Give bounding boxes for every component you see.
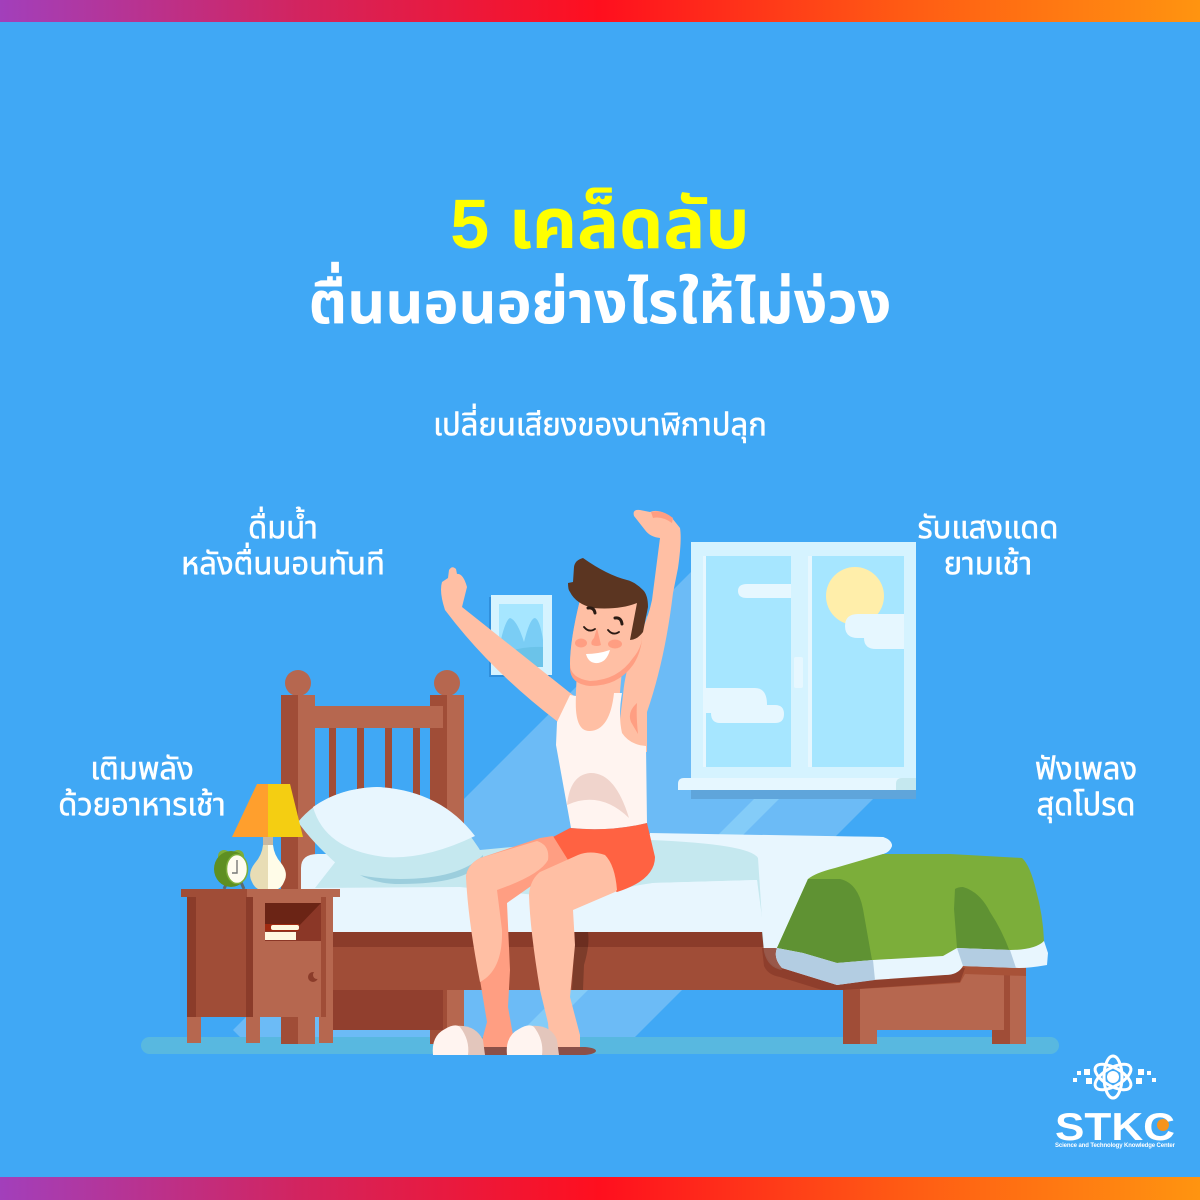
pillow [298,787,483,884]
alarm clock [214,850,248,889]
right arm [618,510,681,752]
tip: morning sunlight [917,510,1059,581]
mattress [301,854,770,932]
hair [568,558,648,640]
front leg [529,852,617,1047]
tip: breakfast: เติมพลัง [90,751,194,786]
shelf [265,903,321,941]
tip: breakfast [58,751,226,822]
title: ตื่นนอนอย่างไรให้ไม่ง่วง [309,261,891,336]
bottom gradient bar [0,1177,1200,1200]
neck [575,670,622,732]
person [433,510,681,1055]
bed sheet [315,833,892,970]
framed picture [489,595,552,677]
logo: atom icon [1091,1056,1135,1098]
green blanket [776,854,1048,985]
tip: favorite music: ฟังเพลง [1035,751,1137,786]
nightstand [181,889,340,1043]
bed headboard [281,670,464,1044]
logo: STKC: Science and Technology Knowledge Center [1055,1143,1176,1149]
window sill shadow [691,790,916,799]
head [570,600,642,686]
blanket underside [776,941,1048,985]
sunlight beam [233,563,882,1044]
nightstand top [181,889,260,897]
cloud: top left [738,584,791,598]
title: 5 เคล็ดลับ [450,185,750,263]
tip: drink water: ดื่มน้ำ [248,506,318,545]
logo: STKC [1055,1056,1176,1149]
top gradient bar [0,0,1200,22]
blanket shadow on bed [762,948,965,990]
tank top [556,693,647,829]
door knob [308,972,318,982]
tip: breakfast: ด้วยอาหารเช้า [58,787,226,822]
logo: pixel squares [1073,1069,1156,1084]
window sill [678,778,916,790]
tip: morning sunlight: ยามเช้า [944,546,1032,581]
bed foot [843,960,1026,1044]
tip: morning sunlight: รับแสงแดด [917,510,1059,545]
shorts [553,823,655,892]
lamp [232,784,303,889]
logo: wordmark: STKC [1055,1106,1175,1149]
title [309,185,891,336]
cloud: right [845,614,904,649]
face details [584,627,619,634]
left arm [441,567,574,722]
tip: drink water [181,506,385,581]
bed frame [330,932,845,1030]
back leg [466,836,568,1048]
window [678,542,916,799]
tip: favorite music: สุดโปรด [1036,787,1136,823]
tip: favorite music [1035,751,1137,823]
shin shadow on bed [572,932,588,990]
slippers [480,1047,596,1055]
floor [141,1037,1059,1054]
tip: change alarm sound: เปลี่ยนเสียงของนาฬิกาปลุก [433,403,767,443]
icon: sun [826,567,884,625]
tip: drink water: หลังตื่นนอนทันที [181,542,385,581]
cloud: lower left [704,688,784,723]
